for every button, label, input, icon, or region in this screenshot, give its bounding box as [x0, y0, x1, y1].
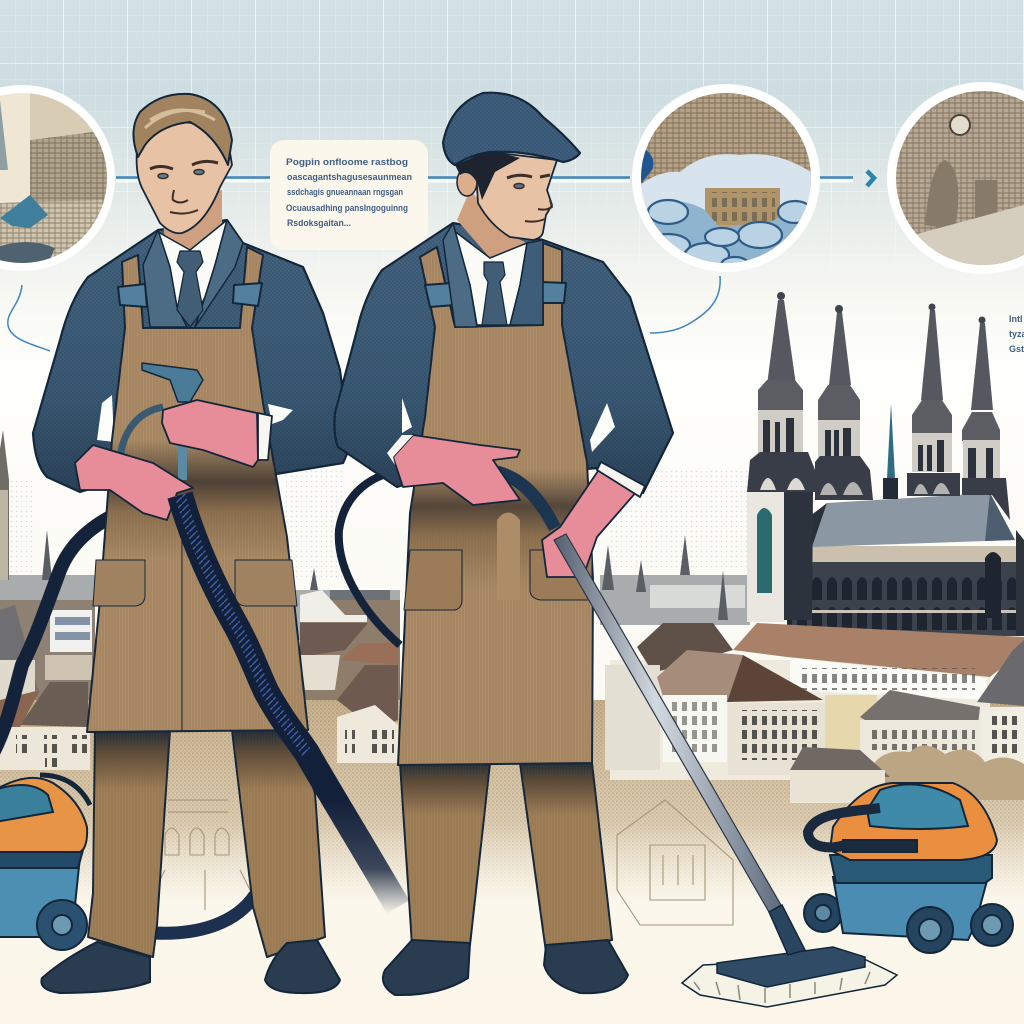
tower 2	[815, 305, 873, 500]
text callout: oascagantshagusesaunmean	[287, 172, 412, 183]
text callout: Pogpin onfloome rastbog	[286, 157, 408, 168]
right man right glove	[542, 462, 645, 577]
text callout: Ocuausadhing pansIngoguinng	[286, 203, 408, 214]
left background hose	[0, 510, 255, 933]
left man face	[137, 122, 232, 233]
spray gun and hose	[120, 363, 203, 480]
connector lines and arrow	[8, 171, 874, 351]
text callout	[270, 140, 428, 250]
mop pole	[554, 534, 781, 912]
right edge text: Intl	[1009, 314, 1022, 324]
ground stipple band	[0, 700, 1024, 905]
left man facial features	[150, 161, 218, 214]
right edge text	[1009, 314, 1024, 354]
right man left glove	[393, 435, 520, 505]
right man facial features	[507, 175, 552, 222]
left man apron	[87, 247, 308, 732]
text callout: Rsdoksgaitan...	[287, 218, 351, 229]
tower 3	[907, 304, 960, 496]
right vacuum	[804, 783, 1013, 953]
tower 4	[962, 316, 1010, 520]
mop head	[682, 905, 897, 1007]
left man trousers	[88, 730, 325, 957]
right man neck	[457, 190, 527, 258]
right hose nozzle	[497, 472, 555, 528]
background with grid	[0, 0, 1024, 700]
right man	[334, 93, 673, 995]
left man neck	[160, 190, 222, 258]
main hose	[180, 495, 398, 907]
right man left cuff	[387, 435, 413, 465]
cathedral nave	[787, 493, 1018, 636]
left man	[33, 94, 398, 993]
right man shirt and tie	[443, 223, 543, 327]
left town	[0, 600, 95, 770]
right man hair	[455, 150, 520, 200]
left man shirt and tie	[143, 220, 243, 327]
right man apron	[398, 243, 593, 765]
tower 1	[747, 292, 815, 622]
left clock tower	[0, 430, 9, 580]
middle circle: foam	[632, 84, 820, 275]
faint sketched buildings foreground	[150, 800, 733, 925]
left circle: city view	[0, 85, 120, 275]
cathedral	[747, 292, 1024, 636]
right man trousers	[400, 763, 612, 952]
left man jacket	[33, 220, 350, 492]
right man shoes	[383, 940, 628, 995]
halftone sky dots	[0, 470, 750, 590]
right man jacket	[334, 223, 673, 493]
thin spire	[883, 403, 898, 499]
right man background hose	[339, 470, 400, 645]
city skyline far distance	[0, 530, 750, 640]
left man shoes	[41, 940, 340, 993]
middle town	[300, 590, 400, 763]
right man face	[476, 152, 557, 240]
left man lower glove	[75, 445, 193, 520]
right man ear	[457, 168, 477, 196]
left vacuum	[0, 775, 90, 950]
side buttress	[1016, 530, 1024, 636]
text callout: ssdchagis gnueannaan rngsgan	[287, 187, 403, 198]
left man upper glove	[162, 400, 272, 467]
left man hair	[133, 94, 232, 165]
right man cap	[443, 93, 580, 165]
right circle: sepia scene	[887, 82, 1024, 275]
right town roofs	[605, 623, 1024, 803]
